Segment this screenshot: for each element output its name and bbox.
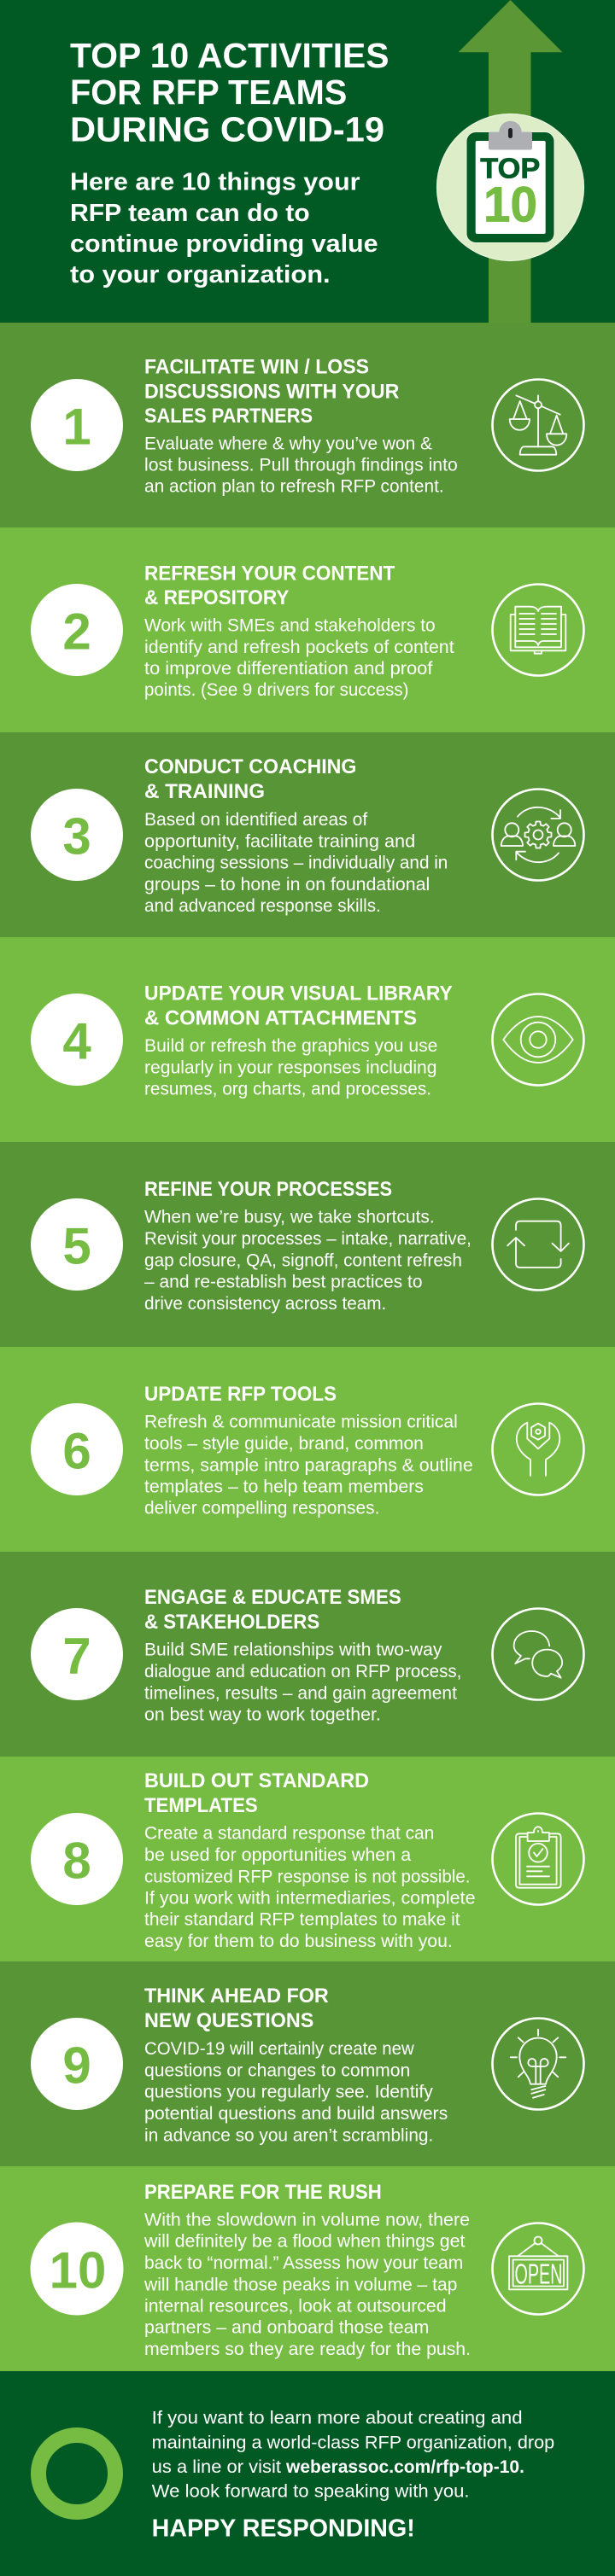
description 5: Revisit your processes – intake, narrative, — [144, 1229, 472, 1249]
arrow: upward growth arrow — [458, 0, 562, 323]
heading 8 — [144, 1769, 369, 1817]
description 10: will definitely be a flood when things get — [144, 2232, 466, 2252]
description 7: timelines, results – and gain agreement — [144, 1683, 457, 1703]
description 9: COVID-19 will certainly create new — [144, 2039, 415, 2059]
description 6: templates – to help team members — [144, 1477, 424, 1497]
description 5: gap closure, QA, signoff, content refresh — [144, 1250, 462, 1270]
description 8: be used for opportunities when a — [144, 1845, 412, 1865]
heading 1: SALES PARTNERS — [144, 405, 313, 428]
description 2: points. (See 9 drivers for success) — [144, 680, 408, 700]
icon: top 10 clipboard badge — [437, 114, 584, 261]
title: DURING COVID-19 — [70, 109, 384, 149]
description 7: Build SME relationships with two-way — [144, 1641, 442, 1660]
description 4: Build or refresh the graphics you use — [144, 1036, 437, 1056]
number badge 8 — [31, 1813, 123, 1905]
number badge 2: 2 — [62, 603, 91, 661]
icon: refresh loop arrows — [492, 1198, 584, 1291]
number badge 4: 4 — [62, 1013, 91, 1070]
heading 2: & REPOSITORY — [144, 586, 289, 609]
number badge 3 — [31, 789, 123, 881]
number badge 9: 9 — [62, 2037, 91, 2095]
heading 5: REFINE YOUR PROCESSES — [144, 1178, 392, 1201]
description 6 — [144, 1413, 473, 1518]
panel: step 3 — [0, 732, 615, 937]
description 7 — [144, 1641, 461, 1725]
number badge 2 — [31, 584, 123, 676]
subtitle: to your organization. — [70, 261, 331, 288]
description 3: opportunity, facilitate training and — [144, 831, 415, 851]
panel: step 6 — [0, 1347, 615, 1552]
description 1: Evaluate where & why you’ve won & — [144, 434, 432, 454]
subtitle: continue providing value — [70, 230, 378, 258]
description 3: and advanced response skills. — [144, 896, 381, 916]
description 8: Create a standard response that can — [144, 1824, 434, 1844]
heading 4: & COMMON ATTACHMENTS — [144, 1007, 417, 1030]
heading 10: PREPARE FOR THE RUSH — [144, 2181, 382, 2204]
description 5 — [144, 1208, 472, 1314]
panel: step 7 — [0, 1552, 615, 1757]
closing line: HAPPY RESPONDING! — [152, 2515, 415, 2543]
footer message: If you want to learn more about creating and — [152, 2408, 523, 2427]
icon: wrench and nut — [492, 1403, 584, 1495]
description 5: When we’re busy, we take shortcuts. — [144, 1208, 435, 1227]
description 10: back to “normal.” Assess how your team — [144, 2253, 463, 2273]
description 9: questions you regularly see. Identify — [144, 2083, 433, 2102]
number badge 7 — [31, 1608, 123, 1700]
description 4: resumes, org charts, and processes. — [144, 1080, 431, 1099]
description 6: terms, sample intro paragraphs & outline — [144, 1455, 473, 1475]
panel: header — [0, 0, 615, 323]
heading 4: UPDATE YOUR VISUAL LIBRARY — [144, 982, 453, 1005]
icon: top 10 clipboard badge: TOP — [480, 152, 540, 184]
icon: speech bubbles — [492, 1608, 584, 1700]
heading 7 — [144, 1586, 401, 1634]
description 10: will handle those peaks in volume – tap — [144, 2275, 457, 2294]
number badge 4 — [31, 994, 123, 1086]
description 9: in advance so you aren’t scrambling. — [144, 2125, 433, 2145]
description 8: customized RFP response is not possible. — [144, 1867, 470, 1886]
panel: step 5 — [0, 1142, 615, 1347]
description 6: tools – style guide, brand, common — [144, 1434, 424, 1454]
footer message: We look forward to speaking with you. — [152, 2482, 470, 2502]
title: FOR RFP TEAMS — [70, 73, 347, 112]
heading 2 — [144, 562, 395, 609]
icon: light bulb — [492, 2018, 584, 2110]
heading 4 — [144, 982, 453, 1030]
description 8 — [144, 1824, 475, 1951]
description 5: drive consistency across team. — [144, 1294, 386, 1314]
panel: step 8 — [0, 1757, 615, 1961]
description 8: If you work with intermediaries, complete — [144, 1888, 475, 1908]
heading 1: DISCUSSIONS WITH YOUR — [144, 380, 399, 403]
number badge 6: 6 — [62, 1423, 91, 1480]
description 10 — [144, 2210, 471, 2359]
panel: step 9 — [0, 1961, 615, 2166]
description 3: coaching sessions – individually and in — [144, 854, 448, 873]
number badge 8: 8 — [62, 1833, 91, 1890]
number badge 1: 1 — [62, 399, 91, 456]
panel: step 1 — [0, 323, 615, 527]
description 8: easy for them to do business with you. — [144, 1932, 453, 1951]
panel: footer — [0, 2371, 615, 2576]
footer message: maintaining a world-class RFP organization, drop — [152, 2433, 554, 2452]
heading 9: NEW QUESTIONS — [144, 2009, 313, 2032]
description 2: identify and refresh pockets of content — [144, 638, 454, 657]
description 10: partners – and onboard those team — [144, 2318, 429, 2338]
icon: checklist clipboard — [492, 1813, 584, 1905]
description 3: groups – to hone in on foundational — [144, 875, 430, 895]
heading 2: REFRESH YOUR CONTENT — [144, 562, 395, 585]
icon: open sign — [492, 2223, 584, 2315]
number badge 7: 7 — [62, 1628, 91, 1685]
heading 9 — [144, 1984, 329, 2032]
description 1: lost business. Pull through findings into — [144, 456, 458, 475]
description 4: regularly in your responses including — [144, 1058, 437, 1077]
icon: people and gear cycle — [492, 789, 584, 881]
panel: step 10 — [0, 2166, 615, 2371]
number badge 3: 3 — [62, 808, 91, 865]
icon: eye — [492, 994, 584, 1086]
footer message — [152, 2408, 554, 2502]
icon: green ring — [38, 2435, 115, 2512]
number badge 5 — [31, 1198, 123, 1291]
description 9: potential questions and build answers — [144, 2104, 448, 2124]
heading 9: THINK AHEAD FOR — [144, 1984, 329, 2008]
panel: step 4 — [0, 937, 615, 1142]
icon: top 10 clipboard badge: 10 — [483, 177, 537, 232]
description 5: – and re-establish best practices to — [144, 1273, 422, 1292]
description 3 — [144, 810, 448, 916]
description 10: With the slowdown in volume now, there — [144, 2210, 470, 2229]
title — [70, 36, 390, 149]
panel: step 2 — [0, 527, 615, 732]
heading 3 — [144, 755, 356, 803]
subtitle: RFP team can do to — [70, 200, 310, 227]
number badge 10 — [31, 2223, 123, 2315]
heading 7: ENGAGE & EDUCATE SMES — [144, 1586, 401, 1609]
footer message: us a line or visit — [152, 2457, 281, 2477]
heading 8: BUILD OUT STANDARD — [144, 1769, 369, 1792]
heading 7: & STAKEHOLDERS — [144, 1611, 319, 1634]
heading 6: UPDATE RFP TOOLS — [144, 1383, 337, 1406]
number badge 1 — [31, 379, 123, 471]
icon: balance scales — [492, 379, 584, 471]
description 1: an action plan to refresh RFP content. — [144, 477, 444, 497]
description 1 — [144, 434, 458, 497]
description 2 — [144, 616, 454, 700]
description 6: deliver compelling responses. — [144, 1499, 379, 1518]
heading 1: FACILITATE WIN / LOSS — [144, 355, 369, 378]
heading 3: CONDUCT COACHING — [144, 755, 356, 778]
description 2: Work with SMEs and stakeholders to — [144, 616, 436, 636]
number badge 6 — [31, 1403, 123, 1495]
subtitle: Here are 10 things your — [70, 169, 360, 196]
description 7: on best way to work together. — [144, 1705, 381, 1725]
number badge 10: 10 — [50, 2242, 106, 2299]
title: TOP 10 ACTIVITIES — [70, 36, 390, 75]
description 10: internal resources, look at outsourced — [144, 2297, 446, 2317]
description 3: Based on identified areas of — [144, 810, 367, 830]
heading 1 — [144, 355, 399, 428]
number badge 5: 5 — [62, 1218, 91, 1275]
description 6: Refresh & communicate mission critical — [144, 1413, 458, 1432]
heading 8: TEMPLATES — [144, 1794, 258, 1817]
description 8: their standard RFP templates to make it — [144, 1910, 460, 1930]
description 4 — [144, 1036, 437, 1099]
description 2: to improve differentiation and proof — [144, 659, 433, 679]
subtitle — [70, 169, 378, 288]
description 9: questions or changes to common — [144, 2060, 410, 2080]
number badge 9 — [31, 2018, 123, 2110]
description 10: members so they are ready for the push. — [144, 2340, 471, 2359]
footer message: weberassoc.com/rfp-top-10. — [285, 2457, 524, 2477]
icon: open sign: OPEN — [514, 2258, 562, 2289]
description 9 — [144, 2039, 448, 2145]
description 7: dialogue and education on RFP process, — [144, 1662, 461, 1681]
heading 3: & TRAINING — [144, 780, 265, 803]
icon: open book — [492, 584, 584, 676]
